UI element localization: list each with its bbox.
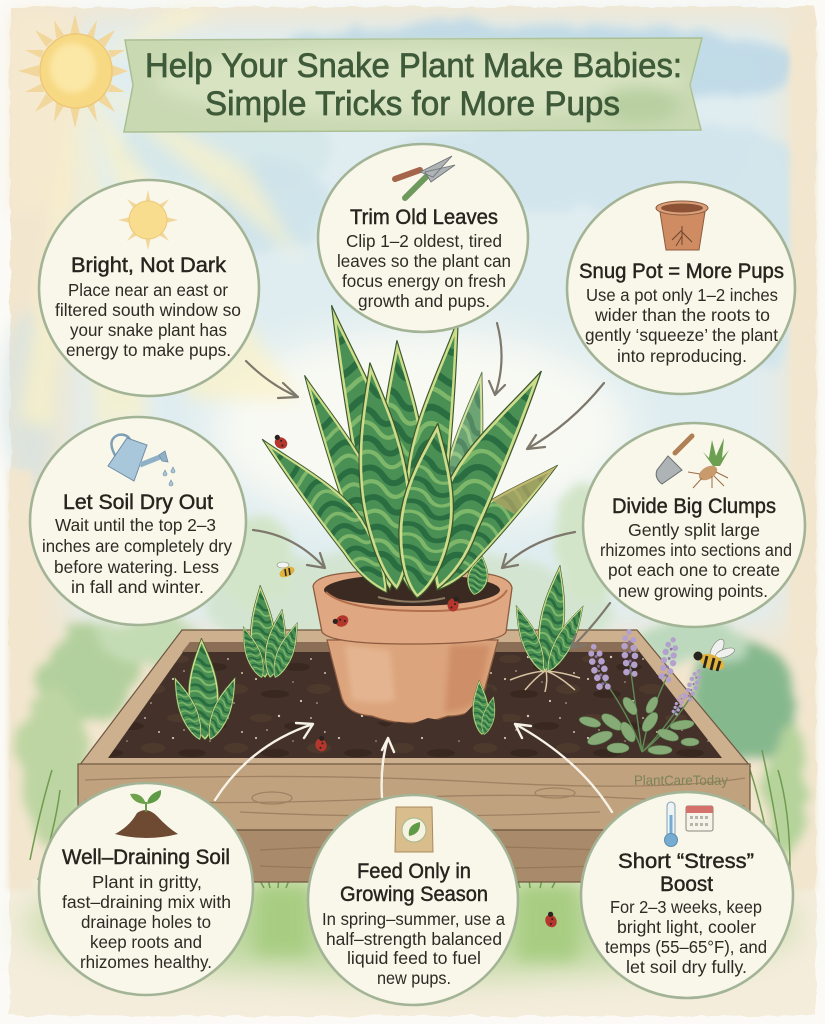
panel: divide big clumps [583,423,805,627]
soil [108,642,722,758]
icon: pot with roots [656,201,708,250]
body text: Plant in gritty, [92,872,202,892]
body text: fast–draining mix with [62,892,231,912]
body text: liquid feed to fuel [347,948,481,968]
arrow: feed [382,738,394,797]
icon: watering can [108,435,175,486]
heading [340,859,488,906]
body text: Wait until the top 2–3 [55,515,216,535]
panel: feed only in growing season [308,795,518,1005]
ladybugs and bees [271,434,736,929]
title text: Help Your Snake Plant Make Babies: [145,47,682,85]
body text: bright light, cooler [617,917,756,937]
body text: let soil dry fully. [626,957,747,977]
body text: inches are completely dry [42,536,232,556]
body text: rhizomes into sections and [600,540,792,560]
body text [42,515,232,597]
heading: Divide Big Clumps [612,494,776,518]
body text: rhizomes healthy. [80,952,212,972]
body text: drainage holes to [81,912,211,932]
title text: Simple Tricks for More Pups [205,85,620,123]
panel: well-draining soil [39,783,253,995]
body text: in fall and winter. [71,577,204,597]
raised garden bed [78,630,750,882]
body text: Clip 1–2 oldest, tired [346,231,502,251]
panel: bright, not dark [39,180,259,396]
body text: keep roots and [90,932,202,952]
arrow: let soil [253,530,325,568]
arrow: snug [527,383,604,449]
body text: before watering. Less [54,557,219,577]
body text: pot each one to create [608,560,780,580]
pup back left [222,583,320,687]
grass ground [25,750,795,975]
arrows from bottom panels [215,723,612,812]
icon: pruners [395,156,455,198]
heading: Let Soil Dry Out [63,490,213,514]
body text [585,285,778,366]
body text: leaves so the plant can [337,251,511,271]
body text: growth and pups. [358,291,490,311]
icon: soil mound with seedling [115,790,178,838]
body text: filtered south window so [55,300,241,320]
terracotta pot [313,570,512,735]
body text [55,280,241,360]
heading [618,849,754,896]
arrow: stress [515,724,612,812]
body text: wider than the roots to [594,305,770,325]
bee large [694,637,736,673]
arrow: trim [489,323,505,395]
pup left [151,636,259,750]
body text: For 2–3 weeks, keep [610,897,762,917]
body text: Use a pot only 1–2 inches [586,285,778,305]
icon: fertilizer bag [395,807,433,852]
heading: Bright, Not Dark [71,253,226,277]
panel: snug pot [567,182,795,394]
pup front [455,679,511,739]
heading: Short “Stress” [618,849,754,873]
arrow: divide [502,532,575,568]
sun rays [18,10,300,430]
body text [605,897,767,977]
arrow: soil [215,723,313,800]
pot pup [445,550,512,601]
heading: Snug Pot = More Pups [579,259,784,283]
body text: new pups. [377,968,451,988]
title text [145,47,682,123]
bee small [277,562,296,579]
body text: temps (55–65°F), and [605,937,767,957]
panel: trim old leaves [318,144,528,332]
arrow: root pup [571,603,610,648]
panel: let soil dry out [30,417,246,625]
body text [62,872,231,972]
body text [600,520,792,601]
soil mound over pot base [325,686,505,735]
panel: short stress boost [581,792,793,998]
pup with roots [492,560,606,692]
body text: half–strength balanced [326,929,502,949]
heading: Feed Only in [357,859,471,883]
heading: Boost [660,872,713,896]
pups in soil [151,560,606,750]
heading: Well–Draining Soil [62,845,230,869]
arrows to plant [246,323,610,648]
heading: Trim Old Leaves [350,205,498,229]
icon: trowel and rhizome [656,436,729,488]
body text: Place near an east or [68,280,228,300]
watermark: PlantCareToday [634,772,728,788]
body text: your snake plant has [70,320,227,340]
body text: In spring–summer, use a [322,909,505,929]
sun [18,14,128,128]
arrow: bright [246,361,298,398]
body text: Gently split large [628,520,760,540]
lavender [578,629,705,754]
icon: thermometer and calendar [664,802,713,846]
bed rim [79,630,750,766]
heading: Growing Season [340,882,488,906]
title banner [124,38,702,132]
body text: energy to make pups. [66,340,231,360]
body text: gently ‘squeeze’ the plant [585,325,778,345]
body text: focus energy on fresh [342,271,506,291]
background foliage [23,485,805,860]
body text [337,231,511,311]
icon: sun [118,190,178,250]
front planks [78,764,750,882]
body text: new growing points. [618,581,768,601]
body text: into reproducing. [617,346,747,366]
snake plant [262,304,558,598]
body text [322,909,505,988]
